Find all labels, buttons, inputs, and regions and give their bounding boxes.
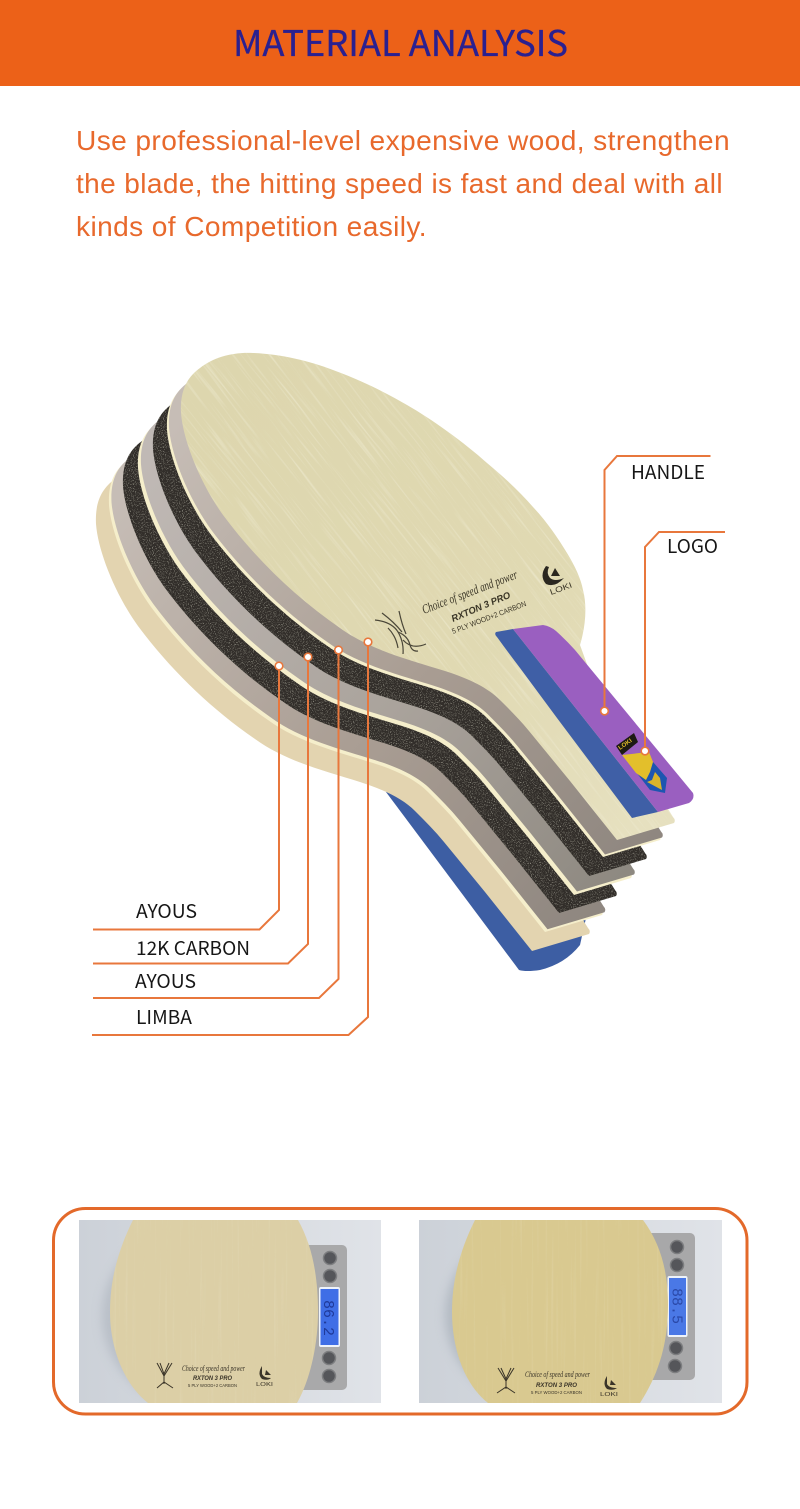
handle side: purple [513, 625, 694, 812]
label: LIMBA: LIMBA [136, 1003, 192, 1030]
layer: top face veneer [181, 352, 675, 840]
blade logo text: Choice of speed and power [420, 566, 520, 617]
handle logo badge [616, 733, 667, 793]
label: 12K CARBON [93, 653, 312, 964]
title: MATERIAL ANALYSIS [233, 16, 568, 67]
label: LIMBA [92, 638, 372, 1035]
photo: blade on scale, right: 88.5 [668, 1288, 684, 1324]
header banner [0, 0, 800, 86]
layer: 12K carbon upper [153, 389, 647, 876]
intro text block: Use professional-level expensive wood, strengthen [76, 125, 730, 156]
label: LOGO [641, 532, 725, 755]
blade print: Choice of speed and power [182, 1364, 246, 1373]
photo: blade on scale, left [79, 1215, 381, 1412]
blade face [110, 1220, 318, 1403]
layer: 12K carbon lower [123, 426, 617, 913]
exploded blade illustration [96, 352, 694, 971]
blade print: LOKI [256, 1382, 274, 1388]
blade print: Choice of speed and power [525, 1370, 591, 1379]
blade print [157, 1363, 274, 1388]
label: AYOUS lower: AYOUS [136, 897, 197, 924]
photo: blade on scale, right [419, 1215, 722, 1411]
scale display [668, 1276, 688, 1337]
layer: ayous middle [138, 404, 635, 895]
panel: weight photos [54, 1208, 747, 1414]
label: AYOUS upper: AYOUS [135, 967, 196, 994]
handle side: blue [495, 629, 658, 818]
scale buttons [668, 1240, 684, 1372]
blade print [497, 1368, 619, 1398]
blade print: RXTON 3 PRO [536, 1383, 577, 1389]
blade face [452, 1220, 668, 1403]
label: AYOUS lower [93, 662, 283, 930]
blade logo text: LOKI [549, 581, 573, 597]
back handle: blue [386, 780, 590, 971]
blade print: 5 PLY WOOD+2 CARBON [531, 1390, 582, 1395]
layer: ayous upper [167, 367, 663, 857]
blade logo text [420, 566, 573, 636]
intro text block [76, 125, 730, 242]
intro text block: kinds of Competition easily. [76, 211, 427, 242]
scale body [652, 1233, 695, 1380]
blade logo text: 5 PLY WOOD+2 CARBON [450, 599, 527, 636]
icon: dragon emblem [375, 611, 426, 654]
label: AYOUS upper [93, 646, 342, 998]
label: HANDLE: HANDLE [631, 458, 705, 485]
scale display [319, 1287, 340, 1347]
label: HANDLE [601, 456, 710, 715]
label: 12K CARBON: 12K CARBON [136, 934, 250, 961]
scale body [303, 1245, 347, 1390]
blade print: 5 PLY WOOD+2 CARBON [188, 1383, 237, 1388]
blade print: RXTON 3 PRO [193, 1376, 232, 1382]
layer: limba [109, 442, 605, 932]
intro text block: the blade, the hitting speed is fast and deal with all [76, 168, 723, 199]
icon: LOKI brand mark [542, 566, 564, 585]
scale buttons [322, 1252, 336, 1382]
handle logo badge: LOKI [618, 738, 634, 752]
photo: blade on scale, left: 86.2 [319, 1300, 336, 1336]
layer: back wood [96, 464, 590, 951]
blade logo text: RXTON 3 PRO [450, 590, 513, 625]
label: LOGO: LOGO [667, 532, 718, 559]
blade print: LOKI [600, 1392, 619, 1398]
